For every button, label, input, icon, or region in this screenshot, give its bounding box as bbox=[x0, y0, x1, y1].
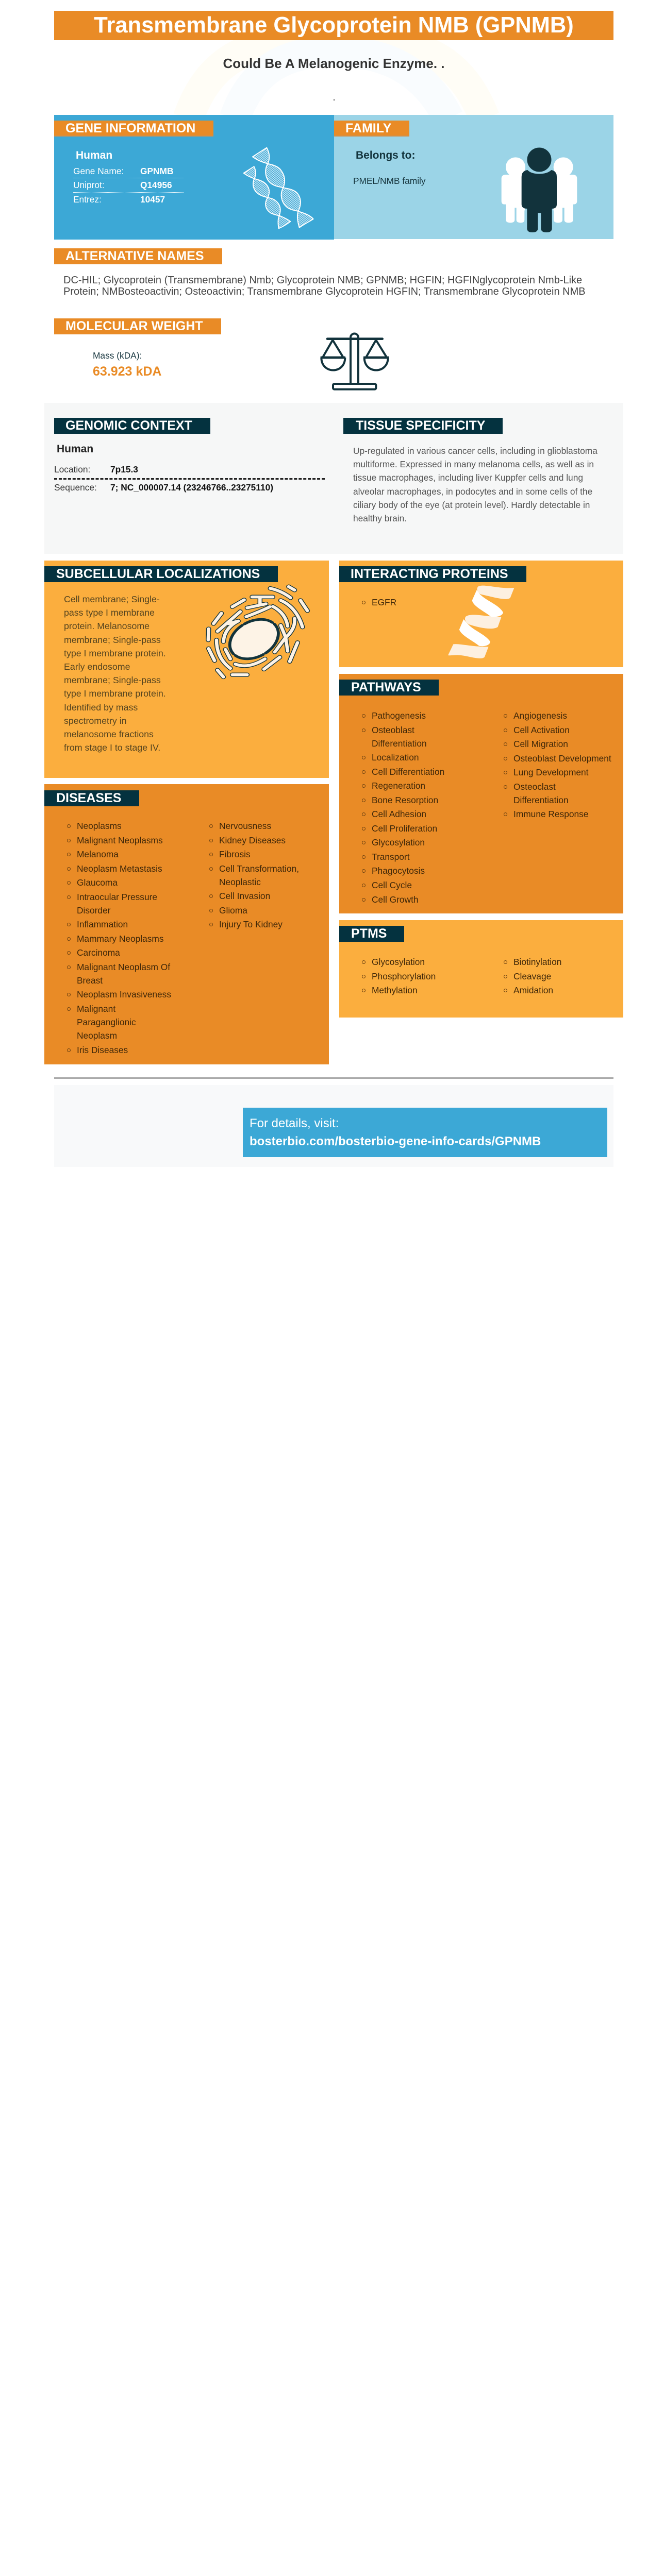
heading: PTMs: PTMS bbox=[351, 926, 387, 941]
list: diseases column 1: Disorder bbox=[77, 905, 110, 916]
text: tissue specificity: healthy brain. bbox=[353, 513, 407, 523]
text: tissue specificity: multiforme. Expressed in many melanoma cells, as well as in bbox=[353, 459, 594, 469]
heading: gene information: GENE INFORMATION bbox=[65, 121, 195, 135]
entrez row: Entrez: bbox=[73, 194, 102, 205]
list: pathways column 1: Cell Growth bbox=[372, 894, 419, 905]
text: subcellular localizations: membrane; Single-pass bbox=[64, 675, 161, 685]
text: subcellular localizations: membrane; Single-pass bbox=[64, 635, 161, 645]
list: diseases column 1: Mammary Neoplasms bbox=[77, 934, 164, 944]
list: diseases column 1: Carcinoma bbox=[77, 947, 120, 958]
list: diseases column 1: Iris Diseases bbox=[77, 1045, 128, 1055]
list: pathways column 2: Differentiation bbox=[513, 795, 569, 805]
text: url: bosterbio.com/bosterbio-gene-info-cards/GPNMB bbox=[250, 1134, 541, 1148]
text: for details: For details, visit: bbox=[250, 1116, 339, 1130]
heading: interacting proteins: INTERACTING PROTEINS bbox=[351, 567, 508, 581]
list: diseases column 2: Kidney Diseases bbox=[219, 835, 286, 845]
icon: cell organelle bbox=[206, 584, 310, 679]
value: mass: 63.923 kDA bbox=[93, 364, 161, 379]
gene name row: GPNMB bbox=[140, 166, 173, 176]
text: subcellular localizations: Cell membrane; Single- bbox=[64, 594, 160, 604]
list: diseases column 1: Malignant bbox=[77, 1004, 115, 1014]
location row bbox=[54, 464, 138, 474]
panel: family bbox=[334, 115, 613, 239]
text: subcellular localizations: type I membrane protein. bbox=[64, 688, 166, 699]
organism label: Human bbox=[57, 443, 93, 455]
gene name row: Gene Name: bbox=[73, 166, 124, 176]
list: PTMs column 2: Biotinylation bbox=[513, 957, 561, 967]
heading: PTMs bbox=[339, 926, 404, 942]
text: subcellular localizations: Identified by mass bbox=[64, 702, 138, 713]
icon: balance scale bbox=[320, 333, 389, 391]
heading: diseases: DISEASES bbox=[56, 791, 121, 805]
list: diseases column 1: Malignant Neoplasm Of bbox=[77, 962, 170, 972]
list: pathways column 1: Regeneration bbox=[372, 781, 425, 791]
list: diseases column 2 bbox=[209, 821, 299, 929]
list: diseases column 1: Melanoma bbox=[77, 849, 119, 859]
panel: genomic context and tissue specificity bbox=[44, 403, 623, 554]
uniprot row bbox=[73, 180, 172, 190]
heading: diseases bbox=[44, 790, 139, 806]
belongs to label: Belongs to: bbox=[356, 149, 416, 161]
list: PTMs column 2: Amidation bbox=[513, 985, 553, 995]
text: subcellular localizations: type I membrane protein. bbox=[64, 648, 166, 658]
list: pathways column 1: Bone Resorption bbox=[372, 795, 438, 805]
list: pathways column 2: Angiogenesis bbox=[513, 710, 567, 721]
list: diseases column 1: Intraocular Pressure bbox=[77, 892, 157, 902]
list: diseases column 2: Neoplastic bbox=[219, 877, 261, 887]
text: tissue specificity: tissue macrophages, including liver Kuppfer cells and lung bbox=[353, 472, 583, 483]
list: diseases column 1: Paraganglionic bbox=[77, 1017, 136, 1027]
heading: pathways bbox=[339, 680, 439, 696]
text: tissue specificity bbox=[353, 446, 597, 523]
list: pathways column 1: Cell Cycle bbox=[372, 880, 412, 890]
panel: diseases bbox=[44, 784, 329, 1064]
list: diseases column 1: Neoplasms bbox=[77, 821, 122, 831]
heading: family: FAMILY bbox=[345, 121, 391, 135]
family name: PMEL/NMB family bbox=[353, 176, 426, 186]
text: tissue specificity: alveolar macrophages, in podocytes and in some cells of the bbox=[353, 486, 592, 497]
icon: people group bbox=[501, 147, 577, 232]
location row: 7p15.3 bbox=[110, 464, 138, 474]
text: subcellular localizations bbox=[64, 594, 166, 753]
list: pathways column 1: Pathogenesis bbox=[372, 710, 426, 721]
list: pathways column 2: Cell Migration bbox=[513, 739, 568, 749]
gene name row bbox=[73, 166, 173, 176]
list: PTMs column 1: Phosphorylation bbox=[372, 971, 436, 981]
list: pathways column 1: Cell Differentiation bbox=[372, 767, 444, 777]
list: interacting proteins: EGFR bbox=[372, 597, 396, 607]
list: diseases column 2: Nervousness bbox=[219, 821, 271, 831]
text: tissue specificity: Up-regulated in various cancer cells, including in glioblastoma bbox=[353, 446, 597, 456]
list: PTMs column 1 bbox=[362, 957, 436, 995]
list: PTMs column 2: Cleavage bbox=[513, 971, 551, 981]
list: pathways column 2 bbox=[504, 710, 611, 819]
sequence row: 7; NC_000007.14 (23246766..23275110) bbox=[110, 482, 273, 493]
small dot bbox=[334, 99, 335, 100]
entrez row bbox=[73, 194, 165, 205]
list: diseases column 1: Neoplasm Metastasis bbox=[77, 863, 162, 874]
text: alternative names: DC-HIL; Glycoprotein (Transmembrane) Nmb; Glycoprotein NMB; GPNMB; HGFIN; HGFINglycoprotein Nmb-Like bbox=[63, 275, 582, 286]
entrez row: 10457 bbox=[140, 194, 165, 205]
list: diseases column 1: Breast bbox=[77, 975, 103, 986]
list: PTMs column 1: Methylation bbox=[372, 985, 418, 995]
panel: pathways bbox=[339, 674, 623, 913]
subtitle: Could Be A Melanogenic Enzyme. . bbox=[223, 56, 445, 71]
text: subcellular localizations: pass type I membrane bbox=[64, 607, 155, 618]
list: diseases column 1: Malignant Neoplasms bbox=[77, 835, 163, 845]
uniprot row: Uniprot: bbox=[73, 180, 105, 190]
title banner: Transmembrane Glycoprotein NMB (GPNMB) bbox=[94, 13, 574, 38]
text: subcellular localizations: spectrometry in bbox=[64, 716, 127, 726]
list: diseases column 1: Neoplasm bbox=[77, 1030, 117, 1041]
heading: genomic context: GENOMIC CONTEXT bbox=[65, 418, 192, 433]
text: subcellular localizations: melanosome fractions bbox=[64, 729, 154, 739]
list: pathways column 2: Osteoblast Development bbox=[513, 753, 611, 764]
icon: protein ribbon bbox=[448, 585, 514, 658]
heading: subcellular localizations: SUBCELLULAR LOCALIZATIONS bbox=[56, 567, 260, 581]
list: pathways column 1: Glycosylation bbox=[372, 837, 425, 848]
list: pathways column 2: Immune Response bbox=[513, 809, 588, 819]
panel: gene information bbox=[54, 115, 334, 240]
sequence row: Sequence: bbox=[54, 482, 97, 493]
list: pathways column 1: Phagocytosis bbox=[372, 866, 425, 876]
uniprot row: Q14956 bbox=[140, 180, 172, 190]
heading: molecular weight: MOLECULAR WEIGHT bbox=[65, 319, 203, 333]
text: subcellular localizations: protein. Melanosome bbox=[64, 621, 150, 631]
list: pathways column 1: Localization bbox=[372, 752, 419, 762]
list: pathways column 2: Lung Development bbox=[513, 767, 588, 777]
text: alternative names bbox=[63, 275, 586, 297]
organism label: Human bbox=[76, 149, 112, 161]
list: PTMs column 1: Glycosylation bbox=[372, 957, 425, 967]
list: pathways column 1 bbox=[362, 710, 444, 905]
text: alternative names: Protein; NMBosteoactivin; Osteoactivin; Transmembrane Glycoprotein HGFIN; Transmembrane Glycoprotein NMB bbox=[63, 286, 586, 297]
text: tissue specificity: ciliary body of the eye (at protein level). Hardly detectable in bbox=[353, 500, 590, 510]
list: pathways column 1: Cell Adhesion bbox=[372, 809, 426, 819]
list: diseases column 1: Glaucoma bbox=[77, 877, 118, 888]
list: diseases column 1 bbox=[67, 821, 171, 1055]
list: pathways column 1: Transport bbox=[372, 852, 410, 862]
panel: interacting proteins bbox=[339, 561, 623, 667]
list: PTMs column 2 bbox=[504, 957, 561, 995]
panel: PTMs bbox=[339, 920, 623, 1018]
panel: subcellular localizations bbox=[44, 561, 329, 778]
list: diseases column 2: Injury To Kidney bbox=[219, 919, 283, 929]
list: diseases column 2: Glioma bbox=[219, 905, 247, 916]
icon: DNA helices bbox=[243, 147, 314, 229]
heading: pathways: PATHWAYS bbox=[351, 680, 421, 694]
list: pathways column 1: Osteoblast bbox=[372, 725, 414, 735]
list: diseases column 2: Fibrosis bbox=[219, 849, 251, 859]
callout: details link bbox=[243, 1108, 607, 1157]
list: pathways column 1: Differentiation bbox=[372, 738, 427, 749]
list: pathways column 1: Cell Proliferation bbox=[372, 823, 437, 834]
list: diseases column 1: Neoplasm Invasiveness bbox=[77, 989, 171, 999]
heading: alternative names: ALTERNATIVE NAMES bbox=[65, 249, 204, 263]
location row: Location: bbox=[54, 464, 90, 474]
list: pathways column 2: Cell Activation bbox=[513, 725, 570, 735]
background watermark bbox=[174, 40, 499, 115]
text: subcellular localizations: from stage I to stage IV. bbox=[64, 742, 160, 753]
list: diseases column 1: Inflammation bbox=[77, 919, 128, 929]
panel: footer bbox=[54, 1085, 613, 1167]
list: diseases column 2: Cell Transformation, bbox=[219, 863, 299, 874]
text: subcellular localizations: Early endosome bbox=[64, 662, 130, 672]
list: diseases column 2: Cell Invasion bbox=[219, 891, 270, 901]
list: pathways column 2: Osteoclast bbox=[513, 782, 556, 792]
heading: tissue specificity: TISSUE SPECIFICITY bbox=[356, 418, 485, 433]
heading: family bbox=[334, 121, 409, 137]
label: mass: Mass (kDA): bbox=[93, 350, 142, 361]
